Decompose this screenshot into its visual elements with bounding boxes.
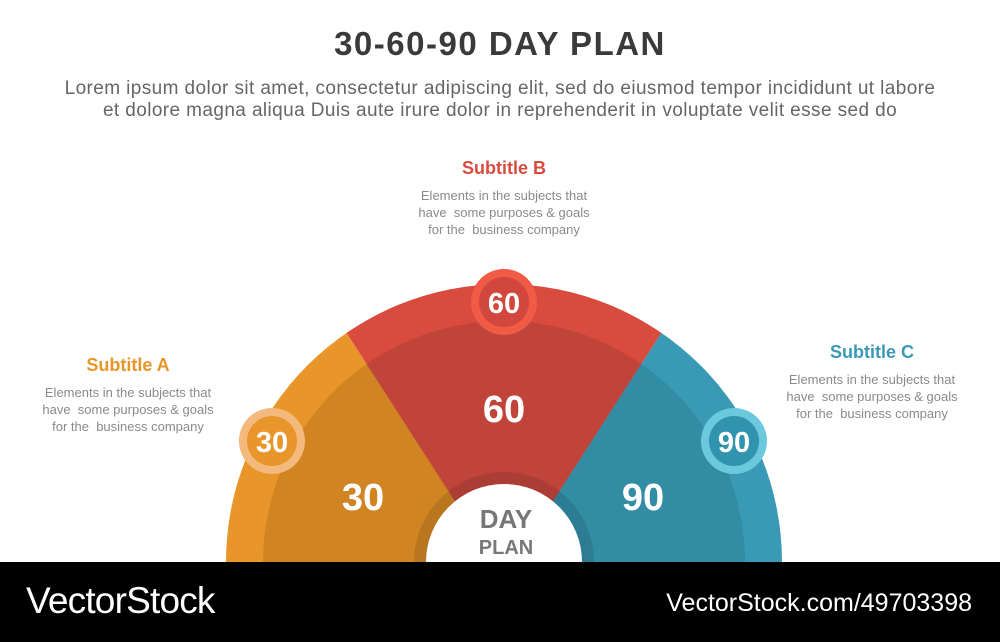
intro text xyxy=(65,78,935,121)
segment: 90 blue xyxy=(553,333,782,562)
segment: 30 orange xyxy=(226,333,455,562)
text block: subtitle A xyxy=(42,355,214,434)
center hub xyxy=(414,472,594,642)
intro text: et dolore magna aliqua Duis aute irure dolor in reprehenderit in voluptate velit esse sed do xyxy=(103,100,897,121)
segment: 60 red xyxy=(346,286,662,502)
footer bar xyxy=(0,562,1000,642)
badge: 30: 30 xyxy=(256,427,288,459)
segment labels: 90 xyxy=(622,477,664,519)
badge: 90: 90 xyxy=(718,427,750,459)
badge: 60 xyxy=(471,269,537,335)
segment labels: 30 xyxy=(342,477,384,519)
text block: subtitle C: have some purposes & goals xyxy=(786,389,958,404)
text block: subtitle B: have some purposes & goals xyxy=(418,205,590,220)
text block: subtitle B: Elements in the subjects that xyxy=(421,188,587,203)
text block: subtitle B: for the business company xyxy=(428,222,580,237)
title: 30-60-90 DAY PLAN xyxy=(334,25,666,62)
badge: 90 xyxy=(701,408,767,474)
text block: subtitle A: have some purposes & goals xyxy=(42,402,214,417)
text block: subtitle A: Subtitle A xyxy=(86,355,170,375)
text block: subtitle A: Elements in the subjects that xyxy=(45,385,211,400)
text block: subtitle C xyxy=(786,342,958,421)
badge: 30 xyxy=(239,408,305,474)
text block: subtitle C: for the business company xyxy=(796,406,948,421)
center hub: PLAN xyxy=(479,537,533,559)
chart: semicircle day plan xyxy=(226,269,782,562)
segment labels xyxy=(342,389,664,519)
footer logo: VectorStock xyxy=(26,580,215,621)
text block: subtitle B xyxy=(418,158,590,237)
badge: 60: 60 xyxy=(488,288,520,320)
text block: subtitle C: Elements in the subjects that xyxy=(789,372,955,387)
text block: subtitle C: Subtitle C xyxy=(830,342,914,362)
segment labels: 60 xyxy=(483,389,525,431)
text block: subtitle A: for the business company xyxy=(52,419,204,434)
footer url: VectorStock.com/49703398 xyxy=(666,589,972,617)
intro text: Lorem ipsum dolor sit amet, consectetur adipiscing elit, sed do eiusmod tempor incididunt ut labore xyxy=(65,78,935,99)
text block: subtitle B: Subtitle B xyxy=(462,158,546,178)
center hub: DAY xyxy=(480,504,532,534)
